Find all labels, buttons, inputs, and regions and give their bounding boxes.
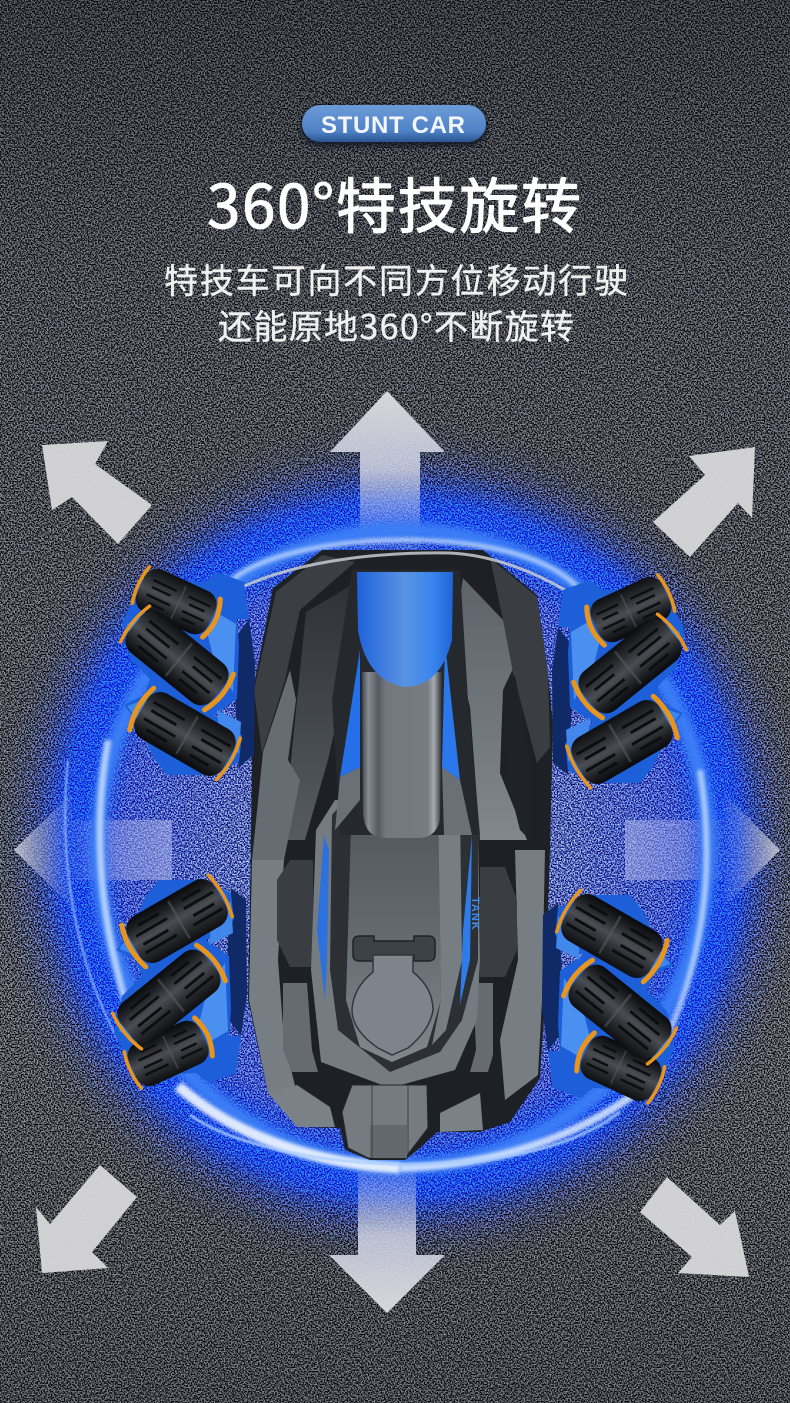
wheel: rear left [109, 872, 247, 1092]
rear bumper right [440, 1093, 483, 1132]
left lower fender [249, 860, 296, 1093]
blue glow halo around the ring [65, 503, 735, 1193]
subtitle line 1: 特技车可向不同方位移动行驶 [164, 254, 628, 303]
stunt car [240, 550, 565, 1160]
title: 360°特技旋转 [207, 159, 581, 246]
wheel: front left [117, 563, 255, 783]
left fender grey stripe [252, 670, 300, 860]
arrow: down-right [640, 1177, 749, 1277]
glowing ring [65, 530, 708, 1168]
blue side strip left [340, 650, 360, 777]
arrow: up-right [653, 447, 755, 557]
right chevron [442, 767, 472, 835]
arrow: left [14, 793, 172, 907]
arrow: up-left [42, 441, 152, 544]
hump dark band [330, 800, 478, 1072]
badge: STUNT CAR [300, 105, 488, 147]
rear block shading [370, 1125, 407, 1158]
badge: STUNT CAR: STUNT CAR [321, 112, 465, 139]
blue side strip right [442, 643, 460, 780]
subtitle line 2: 还能原地360°不断旋转 [218, 300, 574, 349]
arrow: up [330, 391, 445, 565]
arrow: down [329, 1140, 445, 1313]
right upper outer panel [490, 558, 550, 763]
hatch hinge [353, 936, 435, 961]
centre dark channel around chute [332, 570, 480, 835]
air chute [362, 672, 442, 838]
rear bumper left [268, 1085, 335, 1127]
blue stripe right [460, 835, 472, 1005]
right side pod [480, 867, 517, 977]
roof highlight streak [240, 553, 565, 590]
left chevron [335, 767, 360, 830]
left rear pod [283, 983, 318, 1072]
central hood [346, 790, 441, 1062]
right hood shoulder [432, 800, 462, 1045]
arrow: right [625, 793, 780, 907]
rear centre block [342, 1085, 428, 1158]
blue stripe left [317, 835, 329, 1000]
right arch vent [503, 675, 530, 840]
wheel: front right [552, 571, 690, 791]
blue roof scoop [357, 572, 453, 687]
left upper outer panel [254, 555, 355, 753]
hump grey outer band [311, 800, 480, 1088]
right rear pod [470, 983, 493, 1072]
right upper grey panel [453, 578, 527, 840]
car body silhouette [248, 550, 553, 1160]
arrow: down-left [36, 1165, 137, 1273]
hood lettering TANK: TANK [469, 897, 481, 931]
hatch cover [352, 955, 433, 1055]
wheel: rear right [542, 887, 680, 1107]
left side pod [277, 860, 313, 967]
right lower fender [500, 850, 545, 1100]
left upper dark panel [284, 585, 352, 840]
rear block seams [372, 1085, 408, 1158]
